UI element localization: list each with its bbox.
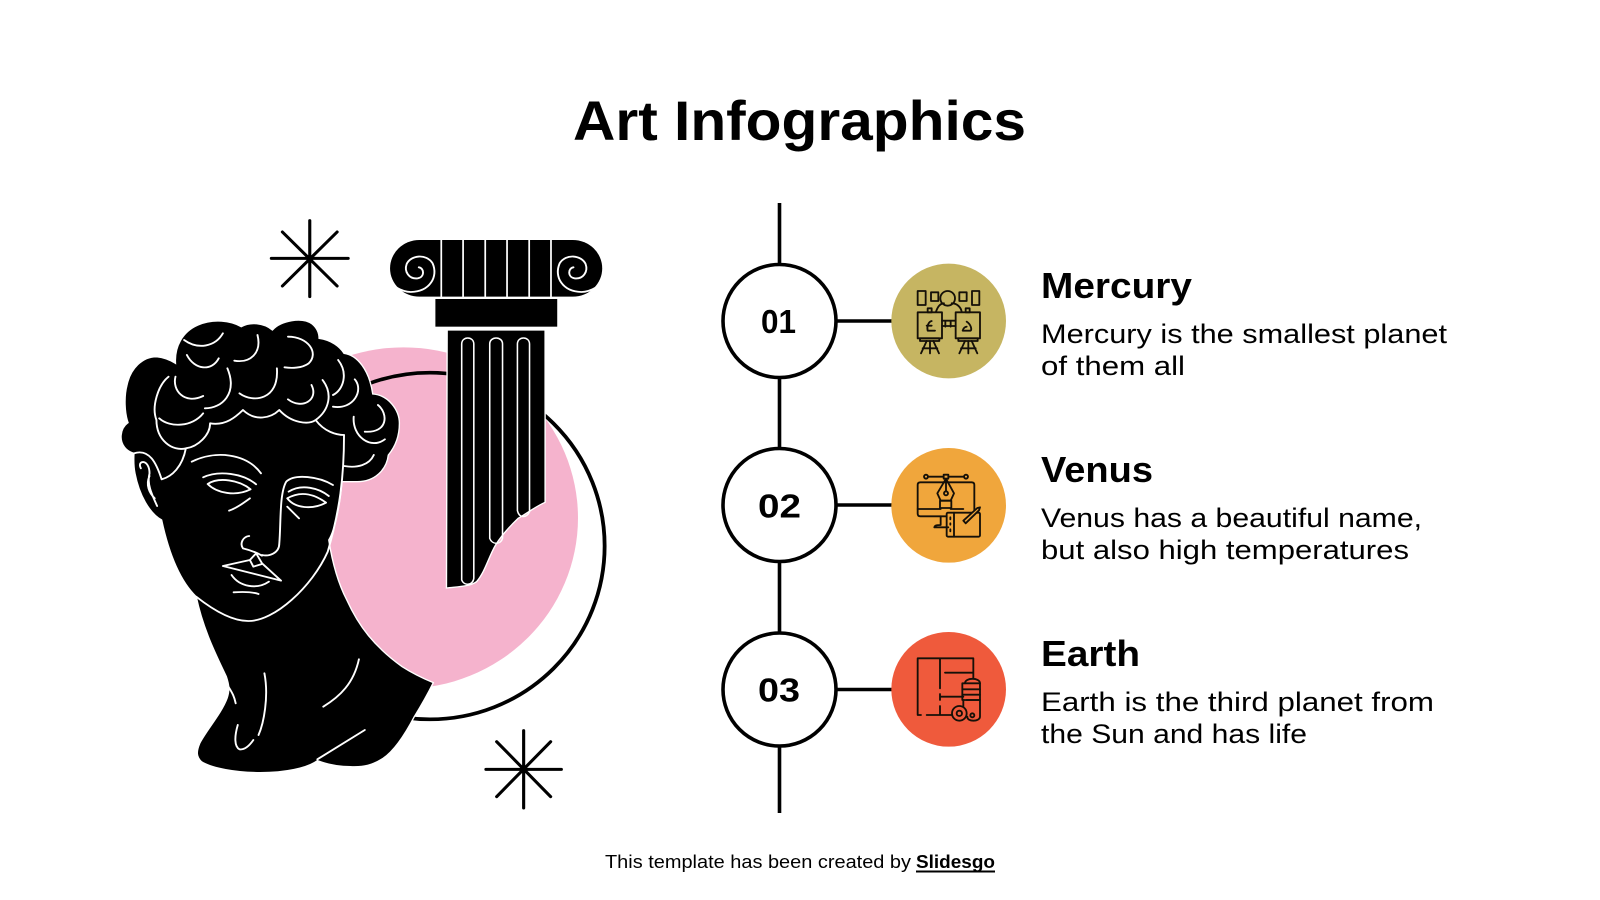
- number circle 02: 02: [758, 488, 801, 524]
- item: Earth: Earth: [1041, 633, 1140, 674]
- shaft: [446, 330, 545, 588]
- item: Venus: but also high temperatures: [1041, 535, 1409, 565]
- hairline and curls: [134, 333, 385, 479]
- item: Venus: Venus has a beautiful name,: [1041, 503, 1422, 533]
- silhouette: [121, 320, 433, 773]
- capital: [390, 240, 602, 297]
- item: Mercury: [1041, 265, 1448, 381]
- number circle 03: 03: [758, 672, 800, 708]
- timeline: [723, 203, 900, 813]
- icon: digital design pen and tablet: [891, 448, 1006, 563]
- number circle 01: 01: [761, 303, 796, 340]
- footer credit: This template has been created by: [605, 851, 912, 872]
- item: Earth: Earth is the third planet from: [1041, 687, 1434, 717]
- connectors: [779, 321, 900, 690]
- outline circle: [255, 373, 605, 719]
- column: [390, 240, 602, 588]
- neck lines: [228, 659, 365, 759]
- title: Art Infographics: [573, 89, 1026, 152]
- icon: floor plan and measuring tools: [891, 632, 1006, 747]
- abacus: [435, 299, 557, 327]
- item: Mercury: Mercury is the smallest planet: [1041, 319, 1448, 349]
- vertical line: [778, 203, 781, 813]
- footer credit: Slidesgo: [916, 851, 995, 872]
- item: Earth: the Sun and has life: [1041, 719, 1307, 749]
- left eye: [192, 455, 261, 511]
- number circle 03: [723, 633, 836, 746]
- item: Venus: Venus: [1041, 449, 1153, 490]
- illustration: classical bust and column: [121, 221, 605, 808]
- star top: [271, 221, 348, 297]
- face outline: [196, 435, 344, 621]
- number circle 02: [723, 448, 836, 562]
- item: Earth: [1041, 633, 1434, 749]
- item: Mercury: of them all: [1041, 351, 1185, 381]
- bust head and neck: [121, 320, 433, 773]
- pink circle: [229, 347, 578, 689]
- icon: painters at easels: [891, 264, 1006, 378]
- item: Venus: [1041, 449, 1422, 565]
- number circle 01: [723, 264, 836, 378]
- item: Mercury: Mercury: [1041, 265, 1192, 306]
- star bottom: [486, 731, 561, 808]
- ear: [140, 462, 157, 506]
- right eye and nose: [242, 477, 333, 556]
- mouth: [223, 553, 281, 594]
